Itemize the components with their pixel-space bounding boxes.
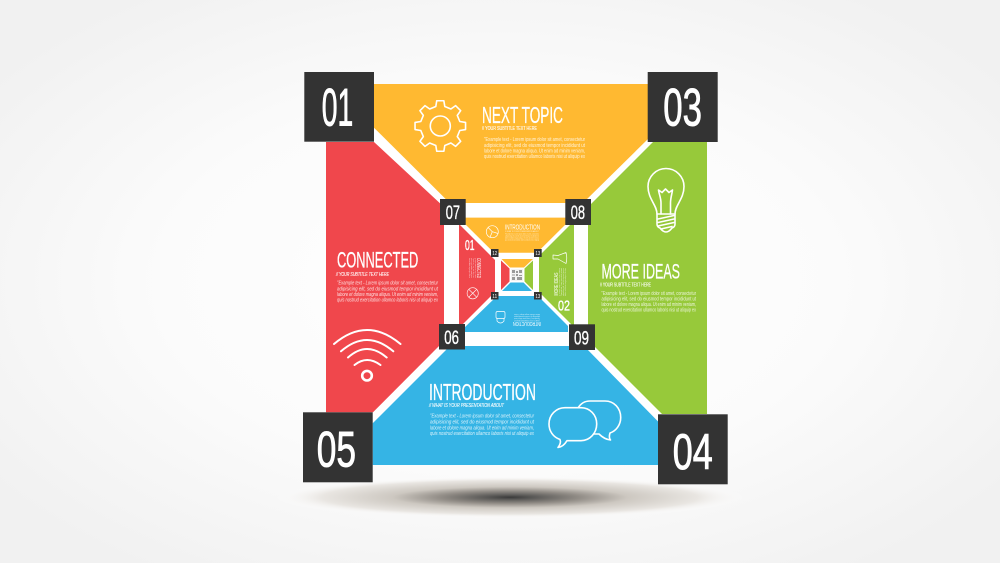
badge: 07: 07: [446, 203, 460, 224]
badge: 13 top: 13: [536, 251, 540, 257]
nested level 3: [501, 259, 533, 291]
text block: introduction: quis nostrud exercitation ullamco laboris nisi ut aliquip ex: [430, 431, 534, 437]
text block: more ideas: quis nostrud exercitation ullamco laboris nisi ut aliquip ex: [602, 308, 696, 314]
heading: level 2 left: CONNECTED: [475, 258, 481, 278]
heading: level 2 right: MORE IDEAS: [554, 272, 560, 296]
text block: level 2 left: labore et dolore magna aliqua. Ut enim: [468, 258, 471, 278]
badge: 09: [569, 324, 595, 350]
text block: more ideas: adipisicing elit, sed do eiusmod tempor incididunt ut: [602, 296, 697, 302]
text block: level 2 left: "Example text - Lorem ipsum dolor sit amet: [472, 258, 475, 278]
badge: 06: [439, 324, 465, 350]
badge: 11: [491, 292, 498, 300]
text block: connected: [337, 280, 439, 304]
badge: 11: 11: [492, 294, 497, 300]
panel: level 2 bottom: [464, 296, 568, 332]
badge: 01: [304, 72, 374, 142]
badge: 08: [565, 199, 591, 225]
badge: 05: [303, 412, 373, 482]
text block: level 2 bottom: adipisicing elit, sed do eiusmod tempor: [514, 315, 540, 318]
text block: more ideas: labore et dolore magna aliqua. Ut enim ad minim veniam,: [602, 302, 696, 308]
text block: level 2 left: adipisicing elit, sed do eiusmod tempor: [470, 258, 473, 278]
badge: 13 top: [534, 249, 542, 257]
nested level 2: [459, 218, 574, 332]
text block: level 2 left: // YOUR SUBTITLE TEXT HERE: [474, 258, 476, 279]
centre code: [511, 269, 523, 281]
icon: pie chart: [486, 226, 498, 238]
text block: introduction: [430, 414, 535, 437]
badge: 12: [491, 249, 498, 257]
panel: connected: [326, 142, 444, 412]
icon: level 2 wifi: [467, 288, 478, 299]
text block: introduction: "Example text - Lorem ipsum dolor sit amet, consectetur: [430, 414, 534, 420]
text block: level 2 right: labore et dolore magna aliqua. Ut enim: [564, 268, 567, 296]
badge: 13 bottom: 13: [536, 294, 540, 300]
heading: introduction: INTRODUCTION: [429, 379, 536, 405]
number: level 2 left: 01: [465, 237, 474, 254]
text block: connected: "Example text - Lorem ipsum dolor sit amet, consectetur: [337, 280, 438, 286]
white square base: [326, 84, 707, 465]
heading: level 2 top: INTRODUCTION: [505, 222, 540, 231]
badge: 04: 04: [673, 424, 713, 480]
text block: connected: adipisicing elit, sed do eiusmod tempor incididunt ut: [337, 286, 439, 292]
panel: level 2 top: [462, 218, 568, 253]
text block: level 2 top: labore et dolore magna aliqua. Ut enim ad minim veniam,: [505, 236, 539, 240]
badge: 01: 01: [322, 78, 353, 138]
panel: introduction: [373, 346, 658, 465]
icon: gear: [415, 101, 466, 151]
text block: introduction: adipisicing elit, sed do eiusmod tempor incididunt ut: [430, 420, 535, 426]
icon: wifi: [334, 330, 400, 381]
panel: level 2 left: [459, 224, 495, 328]
text block: next topic: labore et dolore magna aliqua. Ut enim ad minim veniam,: [484, 148, 585, 154]
text block: level 2 right: [559, 267, 567, 296]
panel: level 3 top: [502, 259, 533, 268]
text block: level 2 right: "Example text - Lorem ipsum dolor sit amet: [560, 268, 563, 296]
text block: level 2 right: // YOUR SUBTITLE TEXT HERE: [559, 267, 561, 296]
subtitle: connected: // YOUR SUBTITLE TEXT HERE: [335, 272, 389, 278]
icon: level 2 bubbles: [496, 312, 505, 323]
panel: next topic: [374, 84, 648, 203]
text block: level 2 top: quis nostrud exercitation ullamco laboris nisi ut aliquip: [505, 238, 539, 242]
text block: level 2 top: "Example text - Lorem ipsum dolor sit amet, consectetur: [505, 232, 539, 236]
text block: connected: labore et dolore magna aliqua. Ut enim ad minim veniam,: [337, 292, 438, 298]
badge: 06: 06: [444, 328, 459, 349]
text block: level 2 top: [505, 230, 540, 242]
heading: next topic: NEXT TOPIC: [482, 102, 563, 128]
panel: level 3 right: [524, 260, 533, 290]
heading: level 2 bottom: INTRODUCTION: [513, 320, 541, 326]
text block: level 2 bottom: // WHAT IS YOUR PRESENTATION ABOUT: [513, 319, 540, 322]
text block: level 2 left: [468, 258, 476, 279]
badge: 12: 12: [492, 251, 497, 257]
text block: next topic: [484, 137, 586, 160]
text block: level 2 right: adipisicing elit, sed do eiusmod tempor: [562, 268, 565, 296]
text block: level 2 bottom: labore et dolore magna aliqua. Ut enim: [514, 313, 540, 316]
subtitle: next topic: // YOUR SUBTITLE TEXT HERE: [482, 126, 537, 132]
text block: more ideas: [602, 291, 697, 314]
icon: light bulb: [648, 169, 684, 232]
badge: 13 bottom: [534, 292, 542, 300]
icon: speech bubbles: [549, 401, 621, 448]
text block: level 2 bottom: "Example text - Lorem ipsum dolor sit amet: [514, 317, 540, 320]
badge: 05: 05: [317, 422, 356, 478]
icon: flask: [553, 252, 567, 264]
panel: level 2 right: [539, 221, 574, 327]
badge: 07: [440, 199, 466, 225]
text block: connected: quis nostrud exercitation ullamco laboris nisi ut aliquip ex: [337, 298, 438, 304]
panel: more ideas: [588, 141, 707, 414]
text block: next topic: quis nostrud exercitation ullamco laboris nisi ut aliquip ex: [484, 154, 585, 160]
text block: level 2 top: adipisicing elit, sed do eiusmod tempor incididunt ut: [505, 234, 539, 238]
badge: 04: [658, 414, 728, 484]
badge: 03: 03: [663, 78, 702, 138]
text block: next topic: adipisicing elit, sed do eiusmod tempor incididunt ut: [484, 143, 586, 149]
panel: level 3 left: [501, 260, 510, 290]
panel: level 3 bottom: [502, 282, 532, 291]
text block: level 2 top: // WHAT IS YOUR PRESENTATION ABOUT: [505, 230, 540, 233]
badge: 08: 08: [571, 203, 585, 224]
badge: 09: 09: [574, 328, 589, 350]
text block: more ideas: "Example text - Lorem ipsum dolor sit amet, consectetur: [602, 291, 696, 297]
heading: more ideas: MORE IDEAS: [602, 260, 680, 284]
text block: next topic: "Example text - Lorem ipsum dolor sit amet, consectetur: [484, 137, 585, 143]
ground shadow: [275, 476, 745, 518]
text block: introduction: labore et dolore magna aliqua. Ut enim ad minim veniam,: [430, 426, 534, 432]
subtitle: introduction: // WHAT IS YOUR PRESENTATION ABOUT: [428, 403, 504, 409]
subtitle: more ideas: // YOUR SUBTITLE TEXT HERE: [600, 282, 651, 288]
number: level 2 right: 02: [558, 298, 570, 315]
heading: connected: CONNECTED: [337, 247, 418, 272]
text block: level 2 bottom: [513, 313, 540, 322]
badge: 03: [648, 72, 718, 142]
